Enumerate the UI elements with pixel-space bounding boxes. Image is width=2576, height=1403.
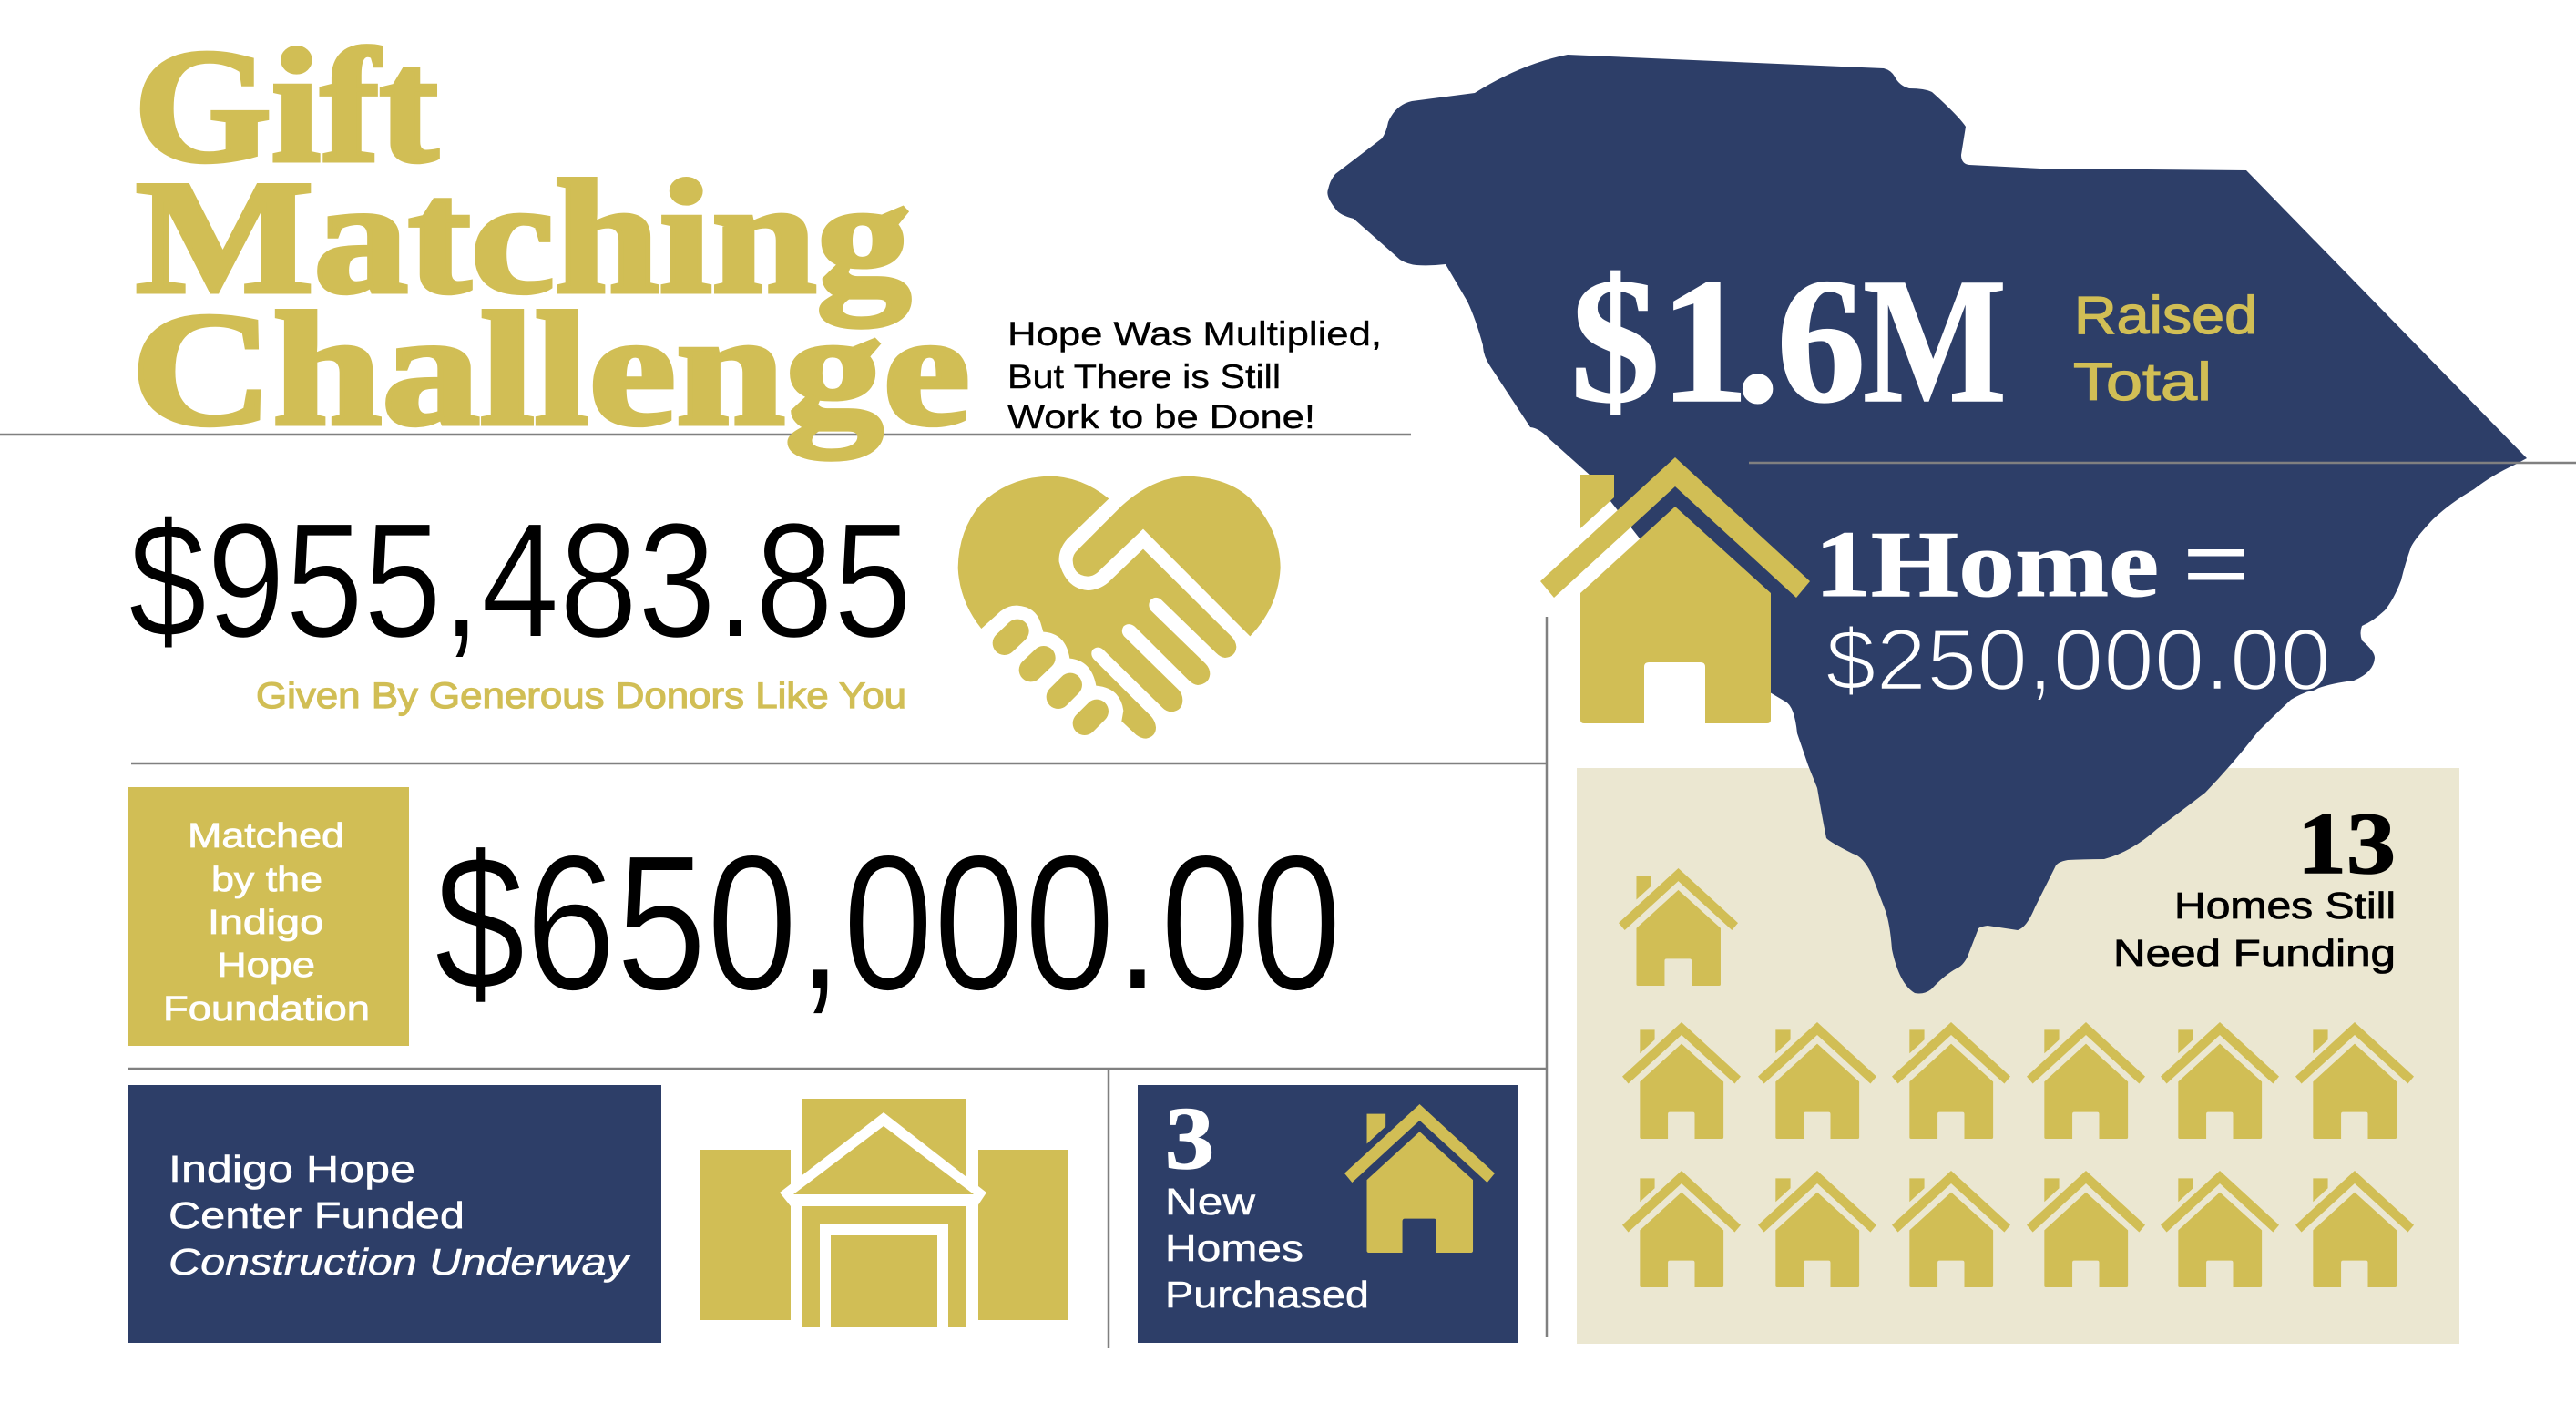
panel: 3 new homes purchased: New (1165, 1181, 1255, 1223)
panel: matched by foundation: Indigo (208, 904, 323, 942)
panel: 3 new homes purchased: Purchased (1165, 1274, 1369, 1316)
panel: Indigo Hope Center funded: Center Funded (169, 1194, 465, 1236)
title: Gift (134, 15, 438, 196)
panel: 3 new homes purchased: 3 (1165, 1090, 1214, 1188)
panel: Indigo Hope Center funded: Construction Underway (169, 1241, 631, 1283)
label: raised total: Total (2073, 353, 2212, 412)
stat: total raised: M (1863, 241, 2007, 440)
panel: matched by foundation: Foundation (163, 990, 370, 1029)
stat: matched amount: $650,000.00 (434, 814, 1342, 1030)
icon grid: thirteen houses (1619, 868, 2414, 1287)
title: Challenge (131, 279, 970, 459)
stat: 13 homes still need funding: 13 (2297, 794, 2396, 892)
map: South Carolina state silhouette (1327, 55, 2527, 993)
label: raised total: Raised (2074, 286, 2257, 345)
icon: large house (1540, 457, 1810, 723)
panel: matched by foundation: Hope (217, 947, 315, 985)
stat: one home cost (1814, 511, 2331, 709)
title (131, 15, 970, 459)
panel: Indigo Hope Center funded: Indigo Hope (169, 1148, 415, 1190)
panel: 3 new homes purchased (1138, 1085, 1518, 1343)
stat: one home cost: 1Home (1814, 512, 2159, 617)
stat: total raised: $1.6 (1570, 241, 1866, 440)
icon: center building (700, 1099, 1068, 1327)
stat: 13 homes still need funding: Need Funding (2113, 932, 2396, 974)
divider lines (0, 435, 2576, 1348)
panel: Indigo Hope Center funded (128, 1085, 661, 1343)
panel: homes still need funding background (1577, 768, 2459, 1344)
subtitle text: Work to be Done! (1007, 398, 1315, 435)
title: Matching (136, 147, 911, 327)
panel: matched by foundation: by the (211, 861, 322, 899)
label: raised total (2073, 286, 2257, 412)
stat: one home cost: $250,000.00 (1825, 611, 2331, 709)
stat: 13 homes still need funding: Homes Still (2174, 885, 2396, 927)
stat: total raised (1570, 241, 2007, 440)
panel: matched by foundation (128, 787, 409, 1046)
caption: given by donors: Given By Generous Donors Like You (256, 676, 906, 716)
subtitle text (1007, 315, 1382, 435)
panel: 3 new homes purchased: Homes (1165, 1227, 1303, 1269)
panel: matched by foundation: Matched (188, 817, 344, 855)
icon: handshake heart (958, 476, 1281, 739)
stat: donor amount: $955,483.85 (128, 489, 912, 672)
stat: 13 homes still need funding (2113, 794, 2396, 974)
subtitle text: But There is Still (1007, 358, 1281, 395)
stat: one home cost: = (2182, 511, 2250, 617)
subtitle text: Hope Was Multiplied, (1007, 315, 1382, 353)
